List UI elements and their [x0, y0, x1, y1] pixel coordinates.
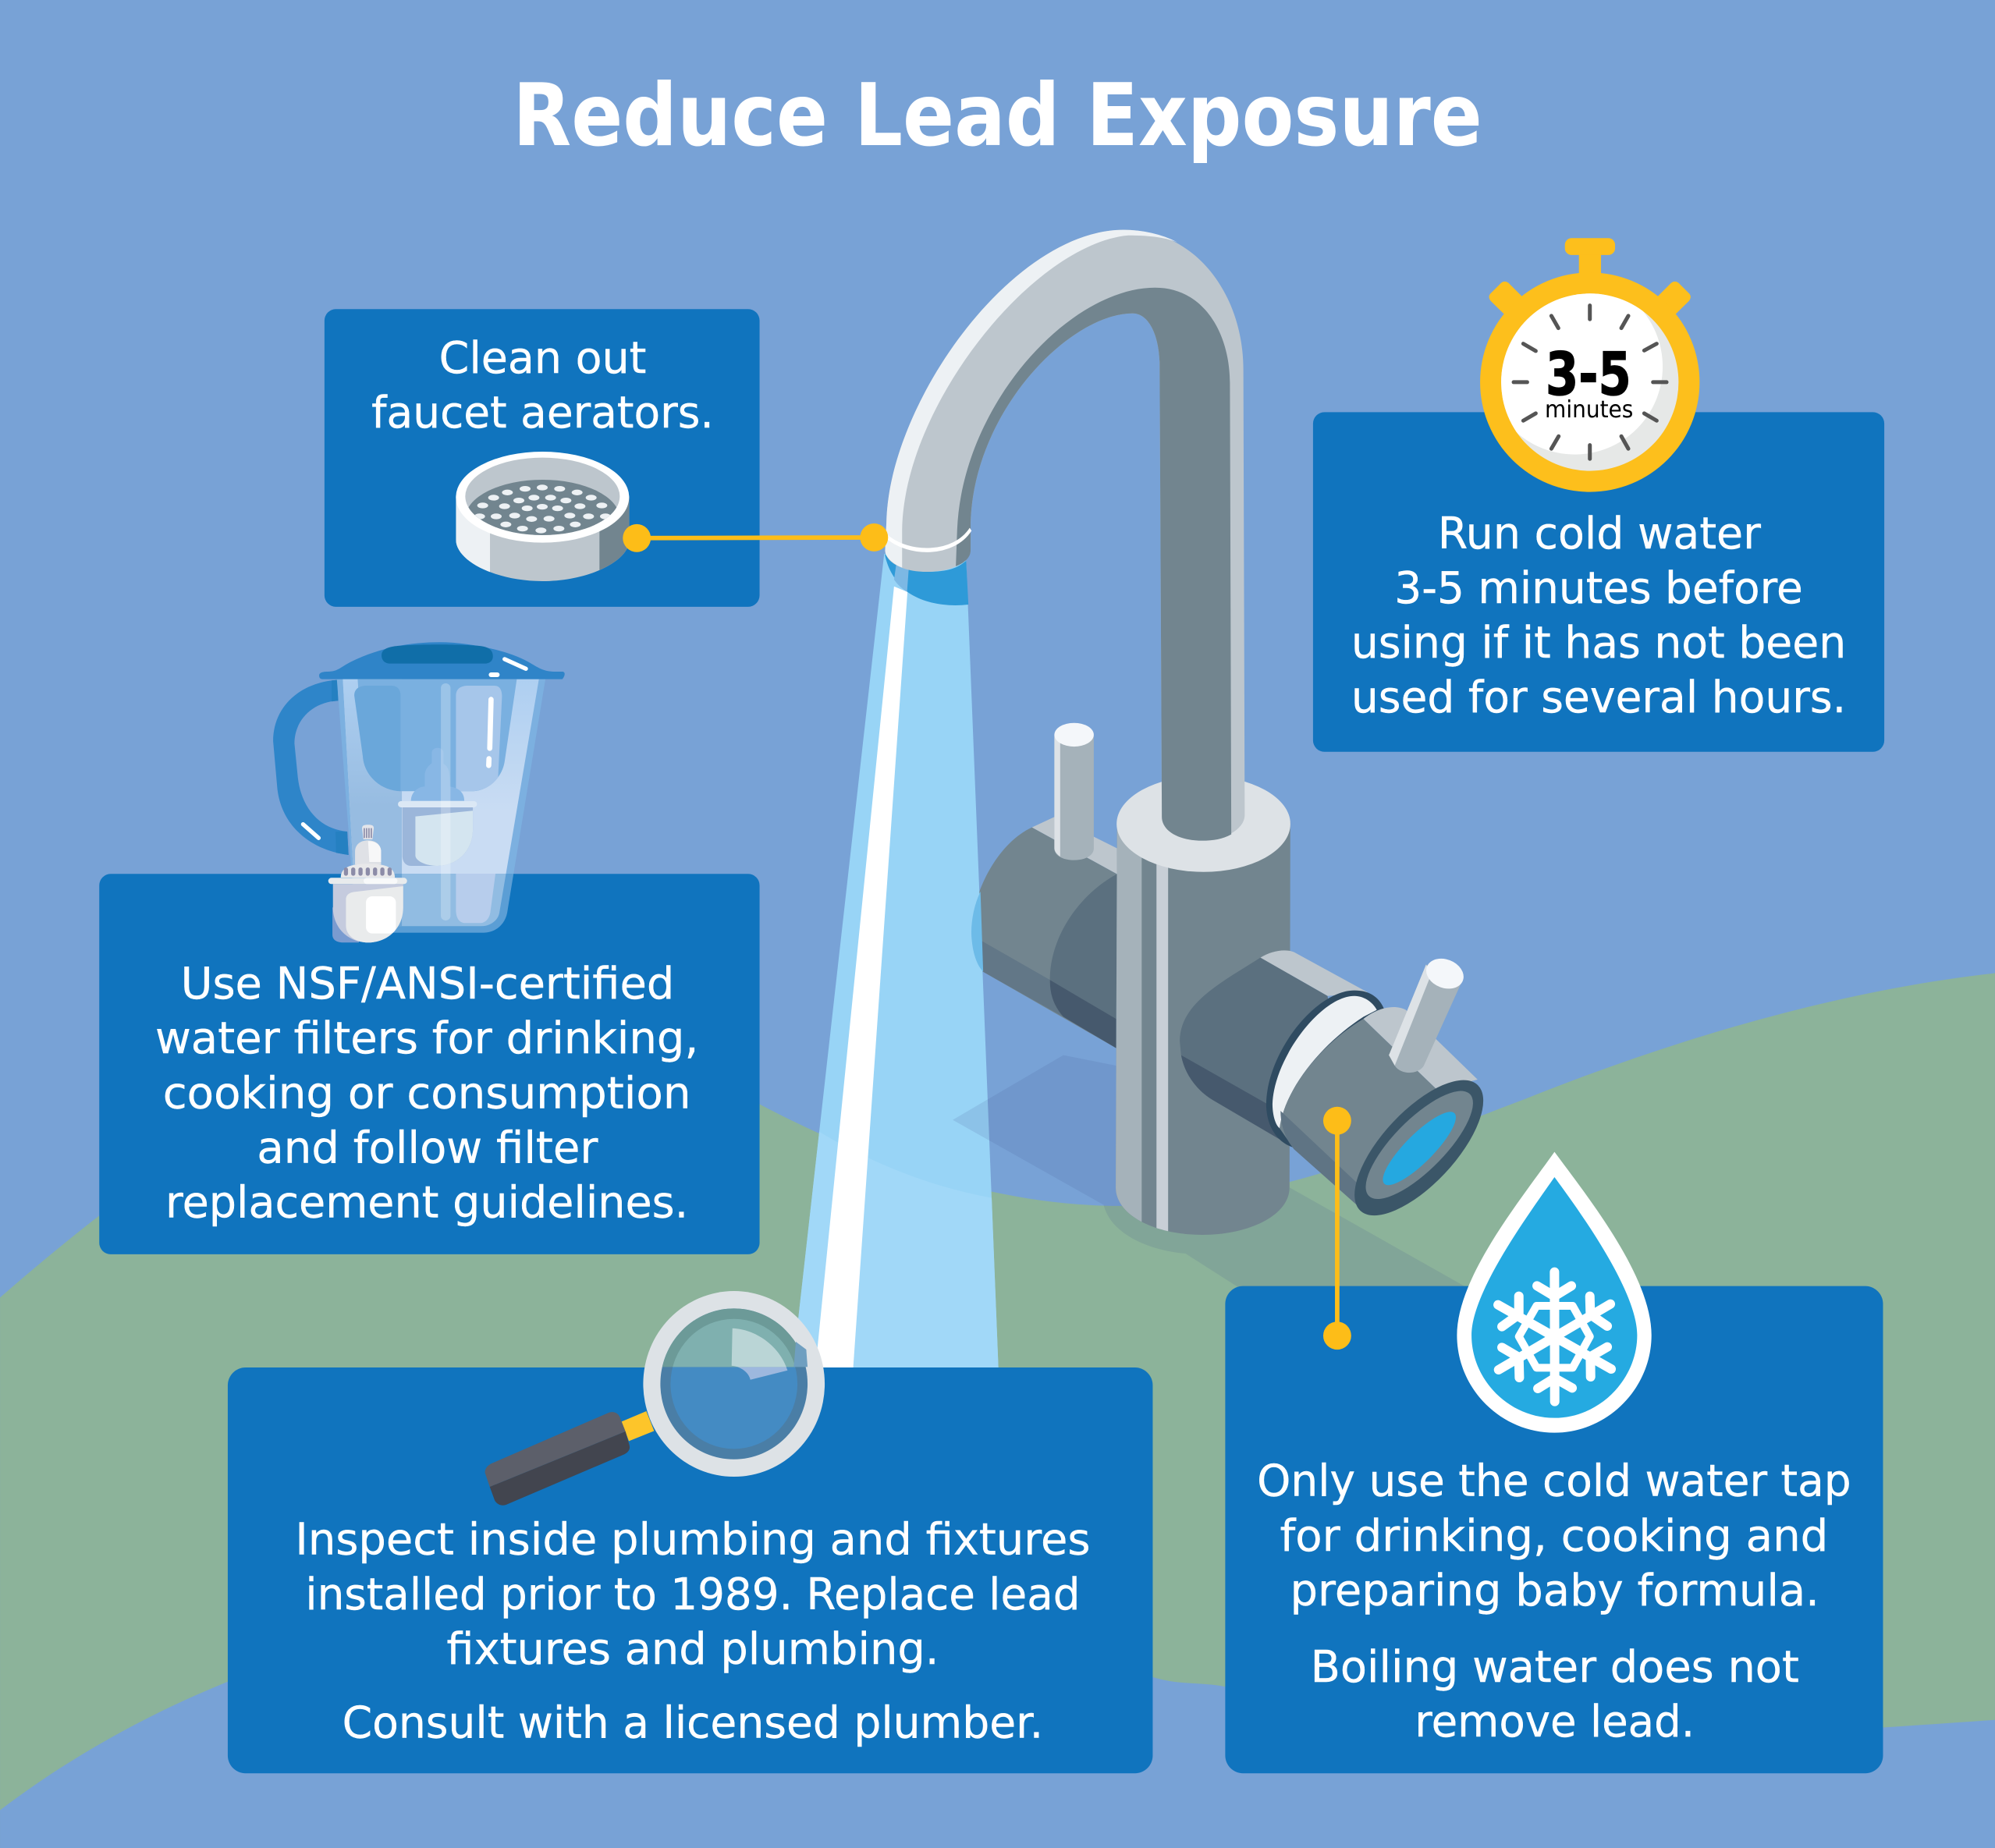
- pitcher lid: [319, 642, 565, 679]
- icon: stopwatch 3-5 minutes: 3-5: [1546, 339, 1631, 409]
- text: water filters: replacement guidelines.: [165, 1178, 688, 1229]
- text: cold water only: remove lead.: [1415, 1697, 1695, 1747]
- hot water body, left cylinder: [971, 817, 1117, 1048]
- text: run cold water: Run cold water: [1438, 509, 1762, 559]
- panel: inspect plumbing: [228, 1367, 1152, 1773]
- icon: stopwatch 3-5 minutes: minutes: [1545, 396, 1633, 424]
- text: cold water only: Only use the cold water tap: [1257, 1456, 1851, 1507]
- cold water body, right cylinder: [1180, 950, 1384, 1147]
- text: water filters: cooking or consumption: [163, 1068, 691, 1119]
- panel: certified water filters: [99, 874, 760, 1254]
- text: cold water only: [1257, 1456, 1851, 1747]
- icon: stopwatch 3-5 minutes: [1480, 238, 1699, 492]
- water stream: [791, 554, 999, 1379]
- connector: cold tap to panel: [1323, 1107, 1351, 1350]
- text: cold water only: Boiling water does not: [1311, 1642, 1799, 1693]
- green hills: [0, 973, 1995, 1848]
- panel: cold water only: [1225, 1286, 1883, 1773]
- text: water filters: [155, 959, 698, 1229]
- text: cold water only: preparing baby formula.: [1290, 1566, 1819, 1616]
- blue foreground hill: [0, 1601, 1995, 1848]
- icon: faucet aerator: [453, 452, 634, 583]
- connector: aerator to spout: [623, 523, 888, 552]
- text: clean aerators: [371, 333, 714, 438]
- text: inspect plumbing: [295, 1515, 1091, 1749]
- text: clean aerators: faucet aerators.: [371, 388, 714, 438]
- pitcher handle: [273, 680, 349, 855]
- text: water filters: water filters for drinking,: [155, 1013, 698, 1064]
- title: Reduce Lead Exposure: [513, 66, 1482, 166]
- text: clean aerators: Clean out: [439, 333, 646, 384]
- ghost filter inside pitcher: [398, 748, 477, 866]
- panel: run cold water: [1313, 412, 1884, 752]
- faucet base column: [1113, 776, 1294, 1240]
- faucet shadow: [953, 1055, 1468, 1289]
- spout: [885, 230, 1244, 841]
- cold water nozzle: [1280, 1007, 1496, 1242]
- faucet illustration with running water: [791, 230, 1496, 1379]
- lower part over the panel: [349, 874, 514, 933]
- icon: magnifying glass: [485, 1291, 825, 1506]
- text: run cold water: 3-5 minutes before: [1394, 563, 1803, 614]
- text: cold water only: for drinking, cooking and: [1280, 1511, 1828, 1562]
- text: water filters: Use NSF/ANSI-certified: [181, 959, 674, 1009]
- text: inspect plumbing: installed prior to 1989. Replace lead: [305, 1570, 1080, 1620]
- cold water lever: [1389, 955, 1464, 1073]
- text: run cold water: [1351, 509, 1846, 723]
- text: inspect plumbing: Inspect inside plumbing and fixtures: [295, 1515, 1091, 1566]
- text: inspect plumbing: fixtures and plumbing.: [446, 1624, 939, 1675]
- small upright handle: [1054, 723, 1094, 860]
- pitcher body: [337, 679, 545, 933]
- text: water filters: and follow filter: [257, 1123, 598, 1173]
- text: run cold water: using if it has not been: [1351, 618, 1846, 669]
- filter cartridge: [328, 825, 407, 942]
- icon: water filter pitcher: [273, 642, 565, 942]
- text: inspect plumbing: Consult with a licensed plumber.: [343, 1698, 1043, 1749]
- text: run cold water: used for several hours.: [1351, 672, 1846, 723]
- panel: clean aerators: [325, 309, 760, 607]
- icon: cold water drop with snowflake: [1457, 1152, 1652, 1433]
